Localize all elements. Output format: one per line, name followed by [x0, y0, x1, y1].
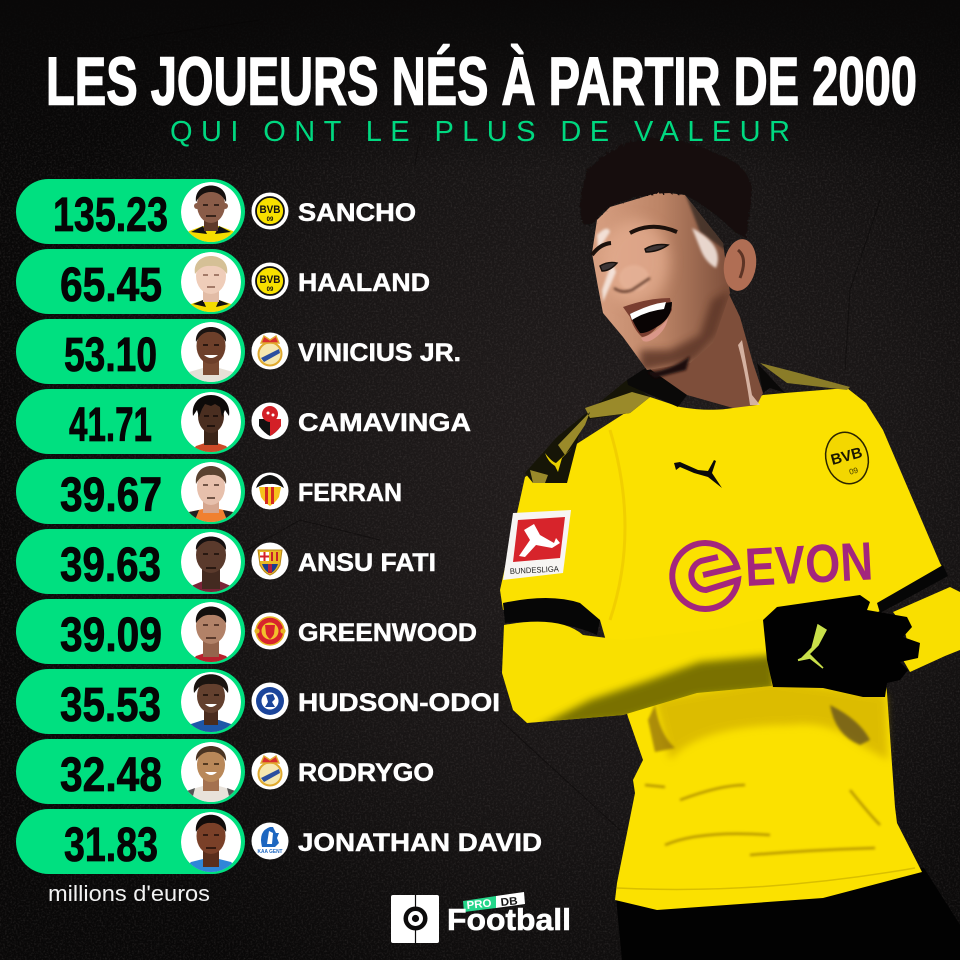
club badge: Gent — [252, 822, 288, 860]
club badge: Valencia — [252, 472, 288, 510]
value bar — [16, 319, 245, 384]
portrait — [181, 252, 241, 312]
PRO tag — [463, 896, 496, 912]
row 5: Ferran — [16, 459, 402, 524]
row 4: Camavinga — [16, 389, 471, 454]
value: 135.23 — [53, 189, 168, 242]
portrait — [181, 392, 241, 452]
glove puma mark — [798, 625, 826, 668]
row 7: Greenwood — [16, 599, 477, 664]
row 6: Ansu Fati — [16, 529, 436, 594]
ear — [721, 237, 759, 293]
ProDB Football logo — [391, 892, 571, 943]
portrait — [181, 532, 241, 592]
player name: SANCHO — [298, 199, 416, 227]
DB tag: DB — [500, 895, 518, 909]
club crest on jersey — [820, 427, 874, 489]
value bar — [16, 459, 245, 524]
value: 31.83 — [64, 819, 158, 872]
right sleeve cuff — [877, 565, 948, 613]
club badge: Dortmund: BVB — [260, 274, 281, 286]
portrait — [181, 672, 241, 732]
portrait — [181, 182, 241, 242]
club badge: Dortmund: 09 — [267, 287, 274, 293]
value bar — [16, 809, 245, 874]
club crest on jersey: BVB — [829, 444, 864, 469]
right forearm sleeve — [893, 587, 960, 672]
mouth — [623, 298, 672, 342]
club badge: Chelsea — [252, 682, 288, 720]
left shoulder pattern — [525, 380, 650, 483]
value: 39.63 — [60, 539, 161, 592]
value bar — [16, 249, 245, 314]
hair fade — [684, 195, 724, 250]
eyes — [600, 244, 668, 271]
value bar — [16, 669, 245, 734]
value bar — [16, 179, 245, 244]
portrait — [181, 322, 241, 382]
main player figure: Sancho — [500, 138, 960, 960]
club badge: Real Madrid — [252, 332, 288, 370]
club badge: Barcelona — [252, 542, 288, 580]
unit label: millions d'euros — [48, 881, 210, 906]
club badge: Dortmund: 09 — [267, 217, 274, 223]
value: 65.45 — [60, 259, 162, 312]
player name: RODRYGO — [298, 759, 434, 787]
value: 39.67 — [60, 469, 162, 522]
jersey torso — [500, 388, 945, 910]
value: 32.48 — [60, 749, 162, 802]
row 3: Vinicius Jr. — [16, 319, 461, 384]
row 10: Jonathan David — [16, 809, 542, 874]
logo mark — [391, 895, 439, 943]
shorts — [616, 868, 960, 960]
portrait — [181, 742, 241, 802]
value bar — [16, 389, 245, 454]
value: 35.53 — [60, 679, 161, 732]
value: 41.71 — [69, 399, 152, 452]
value bar — [16, 599, 245, 664]
club badge: Gent: KAA GENT — [258, 849, 283, 855]
nose — [614, 265, 650, 292]
eyebrows — [592, 227, 677, 255]
portrait — [181, 602, 241, 662]
player name: HUDSON-ODOI — [298, 689, 500, 717]
player name: FERRAN — [298, 479, 402, 507]
collar — [627, 363, 785, 407]
jaw shadow — [640, 290, 730, 372]
hair — [580, 138, 752, 238]
neck — [647, 290, 763, 408]
row 8: Hudson-Odoi — [16, 669, 500, 734]
club badge: Dortmund: BVB — [260, 204, 281, 216]
left sleeve cuff — [503, 598, 600, 635]
club badge: Dortmund — [252, 262, 288, 300]
puma chest logo — [674, 460, 722, 488]
chin beard — [647, 356, 690, 378]
lit cheek and forehead — [601, 220, 669, 304]
jersey shading and folds — [610, 430, 915, 889]
evonik sponsor — [672, 531, 874, 609]
club badge: Rennes — [252, 402, 288, 440]
bundesliga patch: BUNDESLIGA — [510, 564, 560, 576]
value: 39.09 — [60, 609, 162, 662]
club badge: Manchester United — [252, 612, 288, 650]
DB tag — [496, 892, 525, 909]
value bar — [16, 739, 245, 804]
face — [592, 192, 730, 370]
player name: CAMAVINGA — [298, 409, 471, 437]
face highlights — [597, 228, 718, 302]
value: 53.10 — [64, 329, 157, 382]
subtitle: QUI ONT LE PLUS DE VALEUR — [170, 116, 790, 148]
player name: HAALAND — [298, 269, 430, 297]
evonik sponsor: EVON — [743, 531, 874, 598]
player name: ANSU FATI — [298, 549, 436, 577]
row 2: Haaland — [16, 249, 430, 314]
player name: JONATHAN DAVID — [298, 829, 542, 857]
Football wordmark: Football — [447, 902, 571, 937]
player name: VINICIUS JR. — [298, 339, 461, 367]
club badge: Dortmund — [252, 192, 288, 230]
bundesliga patch — [503, 510, 571, 580]
left arm — [502, 618, 775, 728]
row 1: Sancho — [16, 179, 416, 244]
value bar — [16, 529, 245, 594]
PRO tag: PRO — [466, 897, 493, 912]
player name: GREENWOOD — [298, 619, 477, 647]
right shoulder pattern — [760, 363, 850, 390]
club crest on jersey: 09 — [848, 466, 860, 477]
glove — [763, 595, 920, 697]
portrait — [181, 462, 241, 522]
portrait — [181, 812, 241, 872]
sleeve puma mark — [545, 448, 572, 472]
row 9: Rodrygo — [16, 739, 434, 804]
club badge: Real Madrid — [252, 752, 288, 790]
